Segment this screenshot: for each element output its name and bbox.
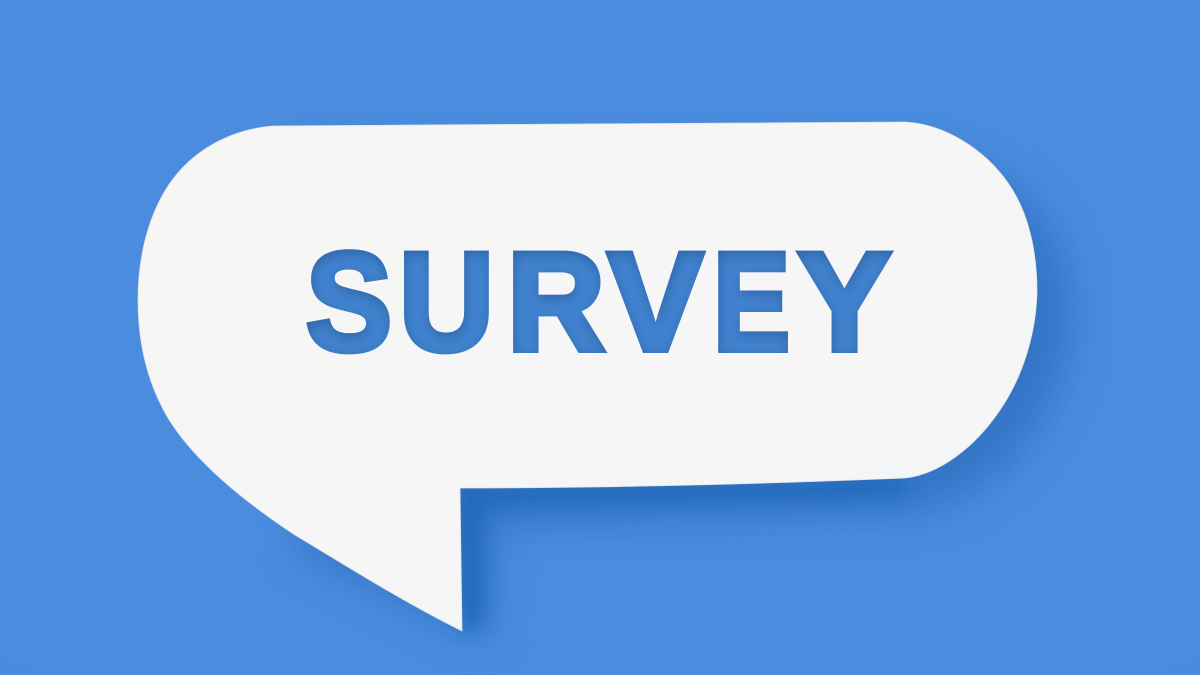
title: SURVEY xyxy=(306,223,891,380)
speech bubble cast shadow xyxy=(300,150,1072,640)
title: SURVEY: E xyxy=(713,223,790,380)
title: SURVEY: S xyxy=(306,223,392,380)
title: SURVEY: R xyxy=(507,223,605,380)
title: SURVEY: U xyxy=(399,223,494,380)
speech bubble xyxy=(138,122,1037,631)
title: SURVEY: Y xyxy=(798,223,891,380)
title: SURVEY: V xyxy=(608,223,703,380)
